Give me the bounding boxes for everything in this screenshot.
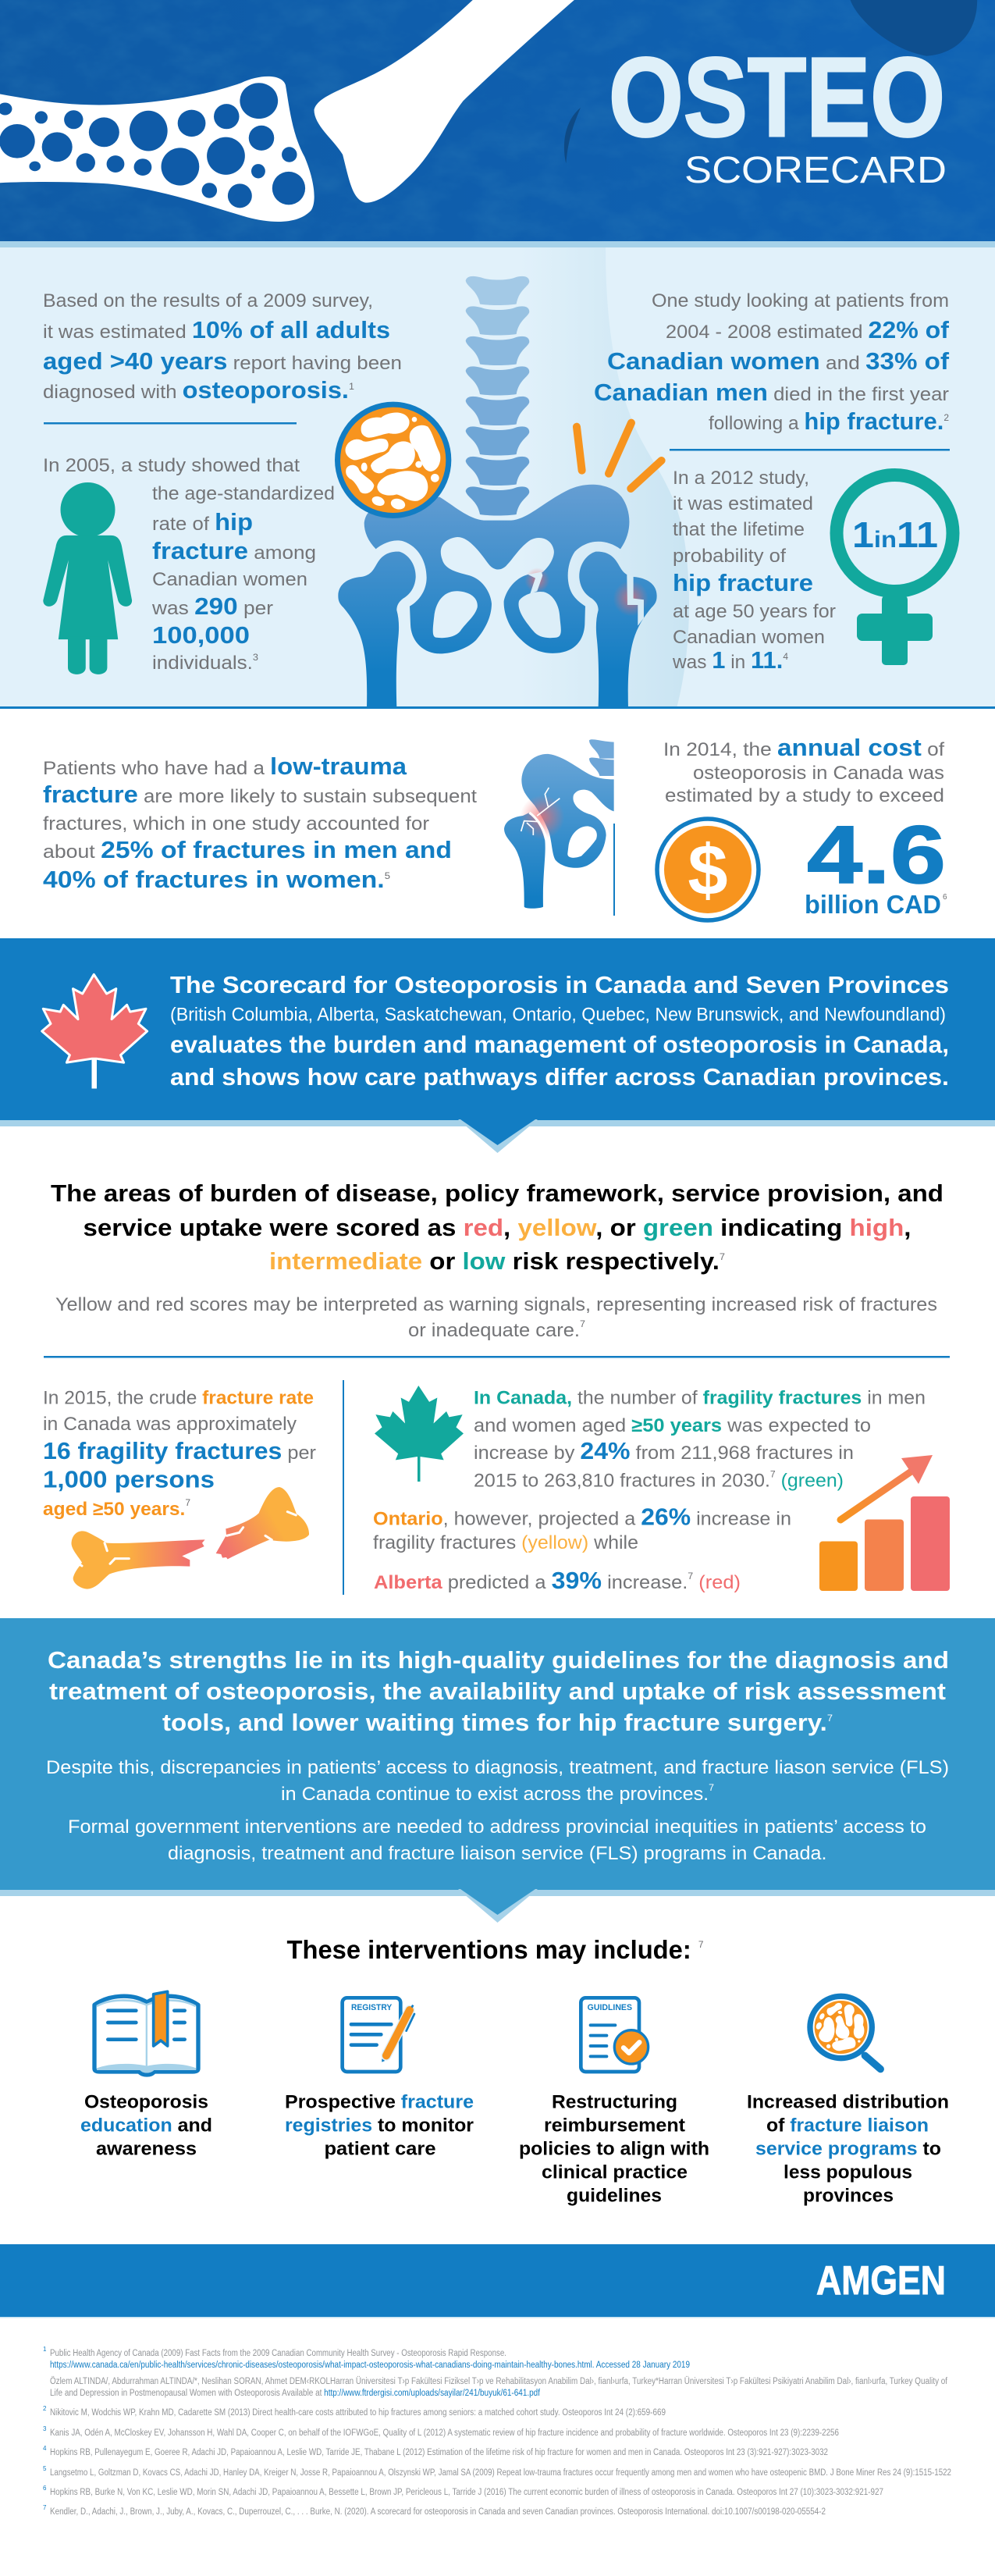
text: scorecard description: (British Columbia, Alberta, Saskatchewan, Ontario, Quebec, New Brunswick, and Newfoundland) [170,1004,946,1026]
references: 6 [43,2485,47,2492]
text: Canada's strengths: Canada’s strengths lie in its high-quality guidelines for the diagnosis and [48,1646,949,1674]
icon: guidelines document: GUIDLINES [588,2003,632,2012]
icon: female symbol with 1 in 11: 1in11 [852,514,938,555]
chart: rising bars with arrow [819,1455,950,1591]
text: low-trauma fracture: 5 [385,870,390,881]
text: 2015 fracture rate: 16 fragility fractures per [43,1437,316,1464]
text: fracture liaison item: of fracture liaison [766,2115,929,2137]
text: Canada's strengths: 7 [827,1713,833,1724]
text: scorecard description [170,971,949,1091]
references: 3 [43,2425,47,2432]
text: 2005 hip fracture rate: was 290 per [151,592,273,620]
text: 2004-2008 mortality statistic: following a hip fracture. [709,407,944,435]
references [43,2346,951,2517]
icon: pelvis with fractures [338,485,657,708]
text: Alberta projection: 7 [688,1571,694,1582]
icon: magnifying glass [810,1996,880,2069]
text: 2012 lifetime probability: 4 [783,651,788,662]
references: Nikitovic M, Wodchis WP, Krahn MD, Cadarette SM (2013) Direct health-care costs attributed to hip fractures among seniors: a matched cohort study. Osteoporos Int 24 (2):659-669 [50,2408,666,2418]
text: Canada fragility fractures: 7 [770,1469,776,1480]
text: 2005 hip fracture rate: Canadian women [152,569,307,590]
references: 4 [43,2445,47,2452]
icon: bone right piece [314,0,574,203]
text: Canada fragility fractures: increase by 24% from 211,968 fractures in [474,1437,854,1464]
text: low-trauma fracture [43,753,477,893]
text: Canada fragility fractures: 2015 to 263,810 fractures in 2030. [474,1471,765,1491]
text: discrepancies: in Canada continue to exist across the provinces. [281,1784,698,1805]
text: Alberta projection: (red) [693,1572,741,1593]
text: registries item [285,2092,474,2160]
text: education item: education and [80,2115,212,2137]
references: Kendler, D., Adachi, J., Brown, J., Juby, A., Kovacs, C., Duperrouzel, C., . . . Burke, N. (2020). A scorecard for osteoporosis in Canada and seven Canadian provinces. Osteoporosis International. doi:10.1007/s00198-020-05554-2 [50,2507,826,2517]
title: OSTEO [609,34,945,160]
text: scorecard description: and shows how care pathways differ across Canadian provinces. [170,1063,949,1091]
text: 2015 fracture rate: 1,000 persons [43,1466,215,1493]
references: Life and Depression in Postmenopausal Women with Osteoporosis Available at http://www.ftrdergisi.com/uploads/sayilar/241/buyuk/61-641.pdf [50,2389,541,2398]
icon: female symbol with 1 in 11 [837,475,953,665]
text: 2005 hip fracture rate: 3 [253,652,258,663]
text: reimbursement item: reimbursement [544,2115,685,2137]
text: Canada's strengths: tools, and lower waiting times for hip fracture surgery. [162,1709,786,1736]
text: 2004-2008 mortality statistic [594,290,950,451]
heading: areas of burden: The areas of burden of disease, policy framework, service provision, and [51,1179,943,1207]
text: scorecard description: The Scorecard for Osteoporosis in Canada and Seven Provinces [170,971,949,998]
references: 1 [43,2346,47,2353]
text: 2015 fracture rate: in Canada was approximately [43,1414,297,1435]
text: Ontario projection: fragility fractures (yellow) while [373,1532,638,1553]
text: 2009 survey statistic: 1 [349,381,354,392]
references: https://www.canada.ca/en/public-health/services/chronic-diseases/osteoporosis/what-impact-osteoporosis-what-canadians-doing-maintain-healthy-bones.html. Accessed 28 January 2019 [50,2361,690,2370]
text: registries item: patient care [325,2139,435,2160]
icon: book [94,1991,198,2075]
references: 2 [43,2405,47,2412]
text: 2015 fracture rate [43,1388,316,1520]
icon: spine [466,276,529,515]
text: scorecard description: evaluates the burden and management of osteoporosis in Canada, [170,1030,949,1059]
text: Canada's strengths: treatment of osteoporosis, the availability and uptake of risk assessment [49,1678,946,1705]
text: 2005 hip fracture rate: rate of hip [152,508,253,535]
text: government interventions [68,1816,926,1864]
text: low-trauma fracture: 40% of fractures in women. [43,866,356,893]
text: fracture liaison item [747,2092,949,2207]
text: registries item: registries to monitor [285,2115,474,2137]
text: discrepancies: 7 [709,1782,714,1793]
text: Alberta projection: Alberta predicted a 39% increase. [374,1567,684,1594]
text: low-trauma fracture: about 25% of fractures in men and [43,836,452,863]
panel: strengths band [0,1618,995,1923]
text: reimbursement item: guidelines [567,2186,662,2207]
text: 2005 hip fracture rate: fracture among [152,537,316,564]
references: Kanis JA, Odén A, McCloskey EV, Johansson H, Wahl DA, Cooper C, on behalf of the IOFWGoE, Quality of L (2012) A systematic review of hip fracture incidence and probability of fracture worldwide. Osteoporos Int 23 (9):2239-2256 [50,2428,839,2438]
text: reimbursement item: Restructuring [552,2092,677,2113]
text: fracture liaison item: provinces [803,2186,894,2207]
text: 2012 lifetime probability: that the lifetime [673,519,805,540]
text: registries item: Prospective fracture [285,2092,474,2113]
text: 2004-2008 mortality statistic: Canadian women and 33% of [607,347,950,375]
references: 5 [43,2465,47,2472]
panel: scorecard band [0,938,995,1153]
references: Hopkins RB, Pullenayegum E, Goeree R, Adachi JD, Papaioannou A, Leslie WD, Tarride JE, Thabane L (2012) Estimation of the lifetime risk of hip fracture for women and men in Canada. Osteoporos Int 23 (3):921-927):3023-3032 [50,2448,828,2457]
text: Canada fragility fractures: and women aged ≥50 years was expected to [474,1415,871,1436]
text: 2004-2008 mortality statistic: 2 [943,412,949,423]
text: 2009 survey statistic: it was estimated 10% of all adults [43,316,390,343]
heading: areas of burden: 7 [720,1251,725,1262]
figure: 4.6 billion CAD: billion CAD [805,890,941,919]
text: low-trauma fracture: Patients who have had a low-trauma [43,753,407,780]
text: fracture liaison item: Increased distribution [747,2092,949,2113]
text: 2005 hip fracture rate [43,455,335,674]
text: annual cost [663,734,944,806]
text: annual cost: In 2014, the annual cost of [663,734,944,761]
panel: footer band with Amgen logo [0,2244,995,2318]
text: 2015 fracture rate: aged ≥50 years. [43,1499,185,1520]
divider: column line [343,1380,344,1595]
icon: osteoporotic bone circle [335,402,451,518]
icon: woman figure [43,482,132,674]
text: 2012 lifetime probability: Canadian women [673,627,825,648]
text: education item: Osteoporosis [84,2092,208,2113]
text: fracture liaison item: service programs to [755,2139,941,2160]
text: Canada fragility fractures: (green) [776,1471,844,1491]
text: Canada fragility fractures [474,1388,926,1491]
text: government interventions: Formal government interventions are needed to address provincial inequities in patients’ access to [68,1816,926,1838]
text: 2005 hip fracture rate: individuals. [152,653,247,674]
title: SCORECARD [684,150,947,191]
header panel [0,0,995,247]
icon: teal maple leaf [375,1386,464,1482]
text: Canada's strengths [48,1646,949,1736]
text: reimbursement item [519,2092,709,2207]
text: 2005 hip fracture rate: the age-standardized [152,483,335,504]
divider: vertical line [613,824,615,916]
text: 2009 survey statistic: Based on the results of a 2009 survey, [43,290,373,311]
figure: 4.6 billion CAD: 4.6 [807,809,946,901]
logo: Amgen: AMGEN [816,2258,946,2304]
heading: areas of burden: intermediate or low risk respectively. [269,1247,706,1275]
icon: porous bone left piece [0,76,314,222]
text: 2012 lifetime probability [672,468,836,674]
text: warning signals note: Yellow and red scores may be interpreted as warning signals, representing increased risk of fractures [55,1294,937,1315]
icon: fractured hip [504,739,614,909]
text: 2005 hip fracture rate: In 2005, a study showed that [43,455,300,476]
text: 2009 survey statistic: diagnosed with osteoporosis. [43,376,341,404]
text: 2012 lifetime probability: at age 50 years for [673,601,836,622]
heading: interventions: 7 [698,1939,704,1950]
text: 2012 lifetime probability: hip fracture [673,569,813,596]
text: Ontario projection [373,1503,791,1553]
text: 2009 survey statistic: aged >40 years report having been [43,347,402,375]
figure: 4.6 billion CAD: 6 [943,893,947,902]
text: 2012 lifetime probability: it was estimated [673,493,813,514]
references: 7 [43,2504,47,2511]
references: Public Health Agency of Canada (2009) Fast Facts from the 2009 Canadian Community Health Survey - Osteoporosis Rapid Response. [50,2349,506,2358]
text: Ontario projection: Ontario, however, projected a 26% increase in [373,1503,791,1530]
icon: guidelines document [581,1998,649,2072]
figure: 4.6 billion CAD [805,809,947,919]
text: discrepancies: Despite this, discrepancies in patients’ access to diagnosis, treatment, and fracture liason service (FLS) [46,1757,949,1778]
heading: interventions: These interventions may include: [287,1935,695,1964]
text: 2009 survey statistic [43,290,402,425]
text: 2015 fracture rate: 7 [185,1497,190,1508]
text: government interventions: diagnosis, treatment and fracture liaison service (FLS) programs in Canada. [168,1843,827,1864]
text: education item: awareness [96,2139,197,2160]
text: 2004-2008 mortality statistic: Canadian men died in the first year [594,379,949,406]
icon: orange pain marks [577,423,662,489]
icon: registry document: REGISTRY [351,2003,393,2012]
references: Hopkins RB, Burke N, Von KC, Leslie WD, Morin SN, Adachi JD, Papaioannou A, Bessette L, Brown JP, Pericleous L, Tarride J (2016) The current economic burden of illness of osteoporosis in Canada. Osteoporos Int 27 (10):3023-3032:921-927 [50,2488,883,2497]
icon: dollar coin: $ [688,831,728,910]
text: warning signals note: or inadequate care. [408,1320,573,1341]
text: education item [80,2092,212,2160]
text: fracture liaison item: less populous [784,2162,912,2183]
icon: broken bone [71,1487,309,1589]
text: annual cost: osteoporosis in Canada was [693,763,944,784]
panel: light blue statistics [0,247,995,709]
text: reimbursement item: clinical practice [542,2162,688,2183]
text: 2004-2008 mortality statistic: 2004 - 2008 estimated 22% of [666,316,950,343]
text: 2012 lifetime probability: In a 2012 study, [673,468,809,489]
text: annual cost: estimated by a study to exceed [665,785,944,806]
text: discrepancies [46,1757,949,1805]
heading: areas of burden [51,1179,943,1275]
icon: dollar coin [657,819,759,920]
icon: registry document [343,1998,414,2072]
text: reimbursement item: policies to align with [519,2139,709,2160]
heading: areas of burden: service uptake were scored as red, yellow, or green indicating high, [83,1214,911,1241]
text: low-trauma fracture: fracture are more likely to sustain subsequent [43,781,477,808]
panel: white fracture and cost section [0,709,995,938]
text: warning signals note: 7 [580,1318,585,1329]
text: low-trauma fracture: fractures, which in one study accounted for [43,813,429,834]
text: Canada fragility fractures: In Canada, the number of fragility fractures in men [474,1388,926,1408]
text: 2012 lifetime probability: was 1 in 11. [673,646,783,674]
text: warning signals note [44,1294,950,1358]
text: 2005 hip fracture rate: 100,000 [152,621,250,649]
text: 2004-2008 mortality statistic: One study looking at patients from [652,290,949,311]
text: 2012 lifetime probability: probability of [673,546,786,567]
text: 2015 fracture rate: In 2015, the crude fracture rate [43,1388,314,1408]
icon: red maple leaf [42,974,147,1088]
